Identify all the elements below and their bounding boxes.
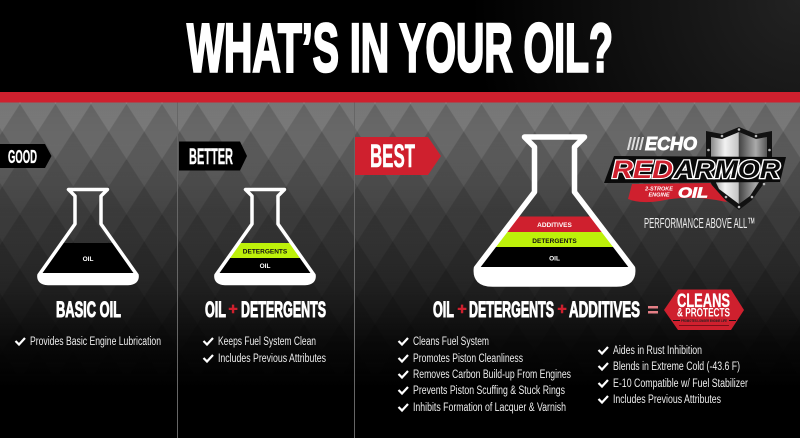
flask: oil, detergents and additives: DETERGENTS: [532, 238, 577, 245]
badge: cleans and protects: PROMOTES LONGER ENGINE LIFE: [681, 318, 727, 323]
list: best right: Aides in Rust Inhibition: [613, 345, 702, 357]
heading: oil + detergents: [205, 297, 326, 322]
list: best left: Prevents Piston Scuffing & Stuck Rings: [413, 385, 565, 397]
badge: cleans and protects: CLEANS: [677, 291, 730, 312]
heading: oil + detergents: DETERGENTS: [241, 297, 326, 322]
badge: cleans and protects: [664, 290, 744, 330]
diamond background: [0, 102, 800, 438]
logo: oil banner: OIL: [678, 184, 708, 202]
list: oil + detergents: [204, 336, 326, 365]
heading: oil + detergents + additives: OIL: [433, 297, 454, 322]
list: best right: Includes Previous Attributes: [613, 394, 721, 406]
logo: red armor wordmark: [604, 156, 786, 184]
red divider bar: [0, 92, 800, 102]
list: best left: [398, 336, 571, 414]
list: best right: E-10 Compatible w/ Fuel Stabilizer: [613, 378, 748, 390]
badge: good: GOOD: [8, 147, 37, 167]
header band: [0, 0, 800, 92]
heading: oil + detergents + additives: +: [557, 301, 567, 318]
flask: basic oil: [38, 190, 138, 285]
flask: oil, detergents and additives: OIL: [549, 256, 560, 262]
list: basic oil: Provides Basic Engine Lubrication: [30, 336, 161, 348]
list: best right: Blends in Extreme Cold (-43.6 F): [613, 361, 740, 373]
list: basic oil: [16, 336, 161, 348]
panel: better: [179, 142, 326, 365]
flask: basic oil: OIL: [83, 256, 93, 263]
list: best left: Promotes Piston Cleanliness: [413, 353, 523, 365]
logo: oil banner: [628, 183, 727, 202]
logo: red armor wordmark: ARMOR: [673, 156, 780, 184]
panel: best: [355, 127, 786, 414]
heading: oil + detergents: OIL: [205, 297, 226, 322]
list: best left: Cleans Fuel System: [413, 336, 489, 348]
list: best right: [598, 345, 748, 406]
heading: oil + detergents + additives: [433, 297, 658, 322]
flask: oil and detergents: [215, 190, 315, 285]
flask: oil and detergents: OIL: [260, 263, 270, 270]
flask: oil, detergents and additives: [474, 137, 635, 286]
badge: better: [179, 142, 247, 170]
heading: basic oil: BASIC OIL: [56, 297, 121, 322]
logo: echo red armor: [604, 127, 786, 232]
logo: oil banner: 2-STROKE: [644, 186, 673, 192]
heading: oil + detergents: +: [228, 301, 238, 318]
panel: good: [0, 144, 161, 348]
badge: better: BETTER: [189, 144, 233, 169]
badge: best: BEST: [370, 138, 415, 174]
list: best left: Inhibits Formation of Lacquer & Varnish: [413, 402, 566, 414]
badge: good: [0, 144, 52, 168]
list: oil + detergents: Includes Previous Attributes: [218, 353, 326, 365]
logo: red armor wordmark: RED: [612, 156, 673, 184]
list: oil + detergents: Keeps Fuel System Clean: [218, 336, 316, 348]
badge: cleans and protects: & PROTECTS: [677, 308, 730, 320]
heading: oil + detergents + additives: +: [457, 301, 467, 318]
badge: best: [355, 137, 441, 175]
logo: oil banner: ENGINE: [648, 192, 670, 198]
logo: echo wordmark: ECHO: [645, 134, 697, 154]
flask: oil and detergents: DETERGENTS: [243, 248, 288, 256]
heading: oil + detergents + additives: DETERGENTS: [469, 297, 554, 322]
flask: oil, detergents and additives: ADDITIVES: [537, 222, 572, 229]
heading: oil + detergents + additives: ADDITIVES: [569, 297, 640, 322]
icon: shield: [706, 127, 772, 210]
list: best left: Removes Carbon Build-up From Engines: [413, 369, 571, 381]
